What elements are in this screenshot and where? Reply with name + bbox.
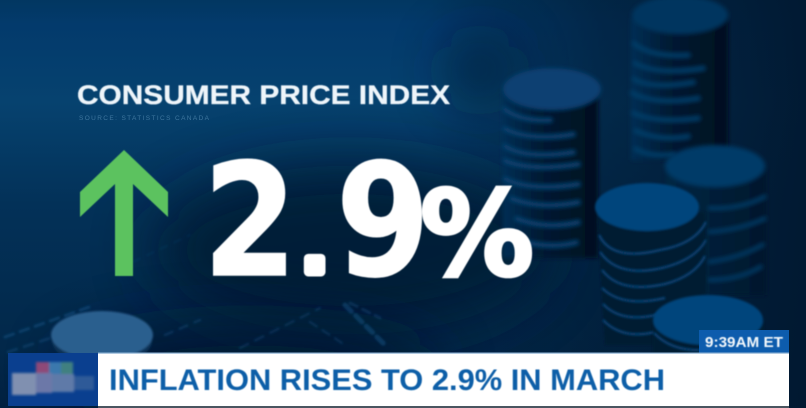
big percentage value [203,130,534,312]
time stamp: 9:39AM ET [705,334,783,351]
big percentage value: . [301,205,328,289]
banner headline: INFLATION RISES TO 2.9% IN MARCH [109,364,665,397]
coin stack: centre [503,68,601,258]
icon: green up arrow [80,150,168,276]
source line: SOURCE: STATISTICS CANADA [79,115,210,122]
big percentage value: 2 [203,130,297,312]
coin stack: front right [653,295,764,356]
coin: bottom-left single coin [51,311,153,365]
big percentage value: 9 [336,130,430,312]
network logo, pixelated [8,353,98,406]
coin stack: front centre [595,183,706,345]
big percentage value: % [420,165,534,303]
coin stack: right rear [665,145,766,295]
chart pattern: faint dashed lines and candlesticks [5,235,385,352]
title: CONSUMER PRICE INDEX [77,80,450,110]
coin stack: top centre-right [630,0,728,160]
lower-third banner [98,352,789,408]
time stamp [699,330,789,354]
